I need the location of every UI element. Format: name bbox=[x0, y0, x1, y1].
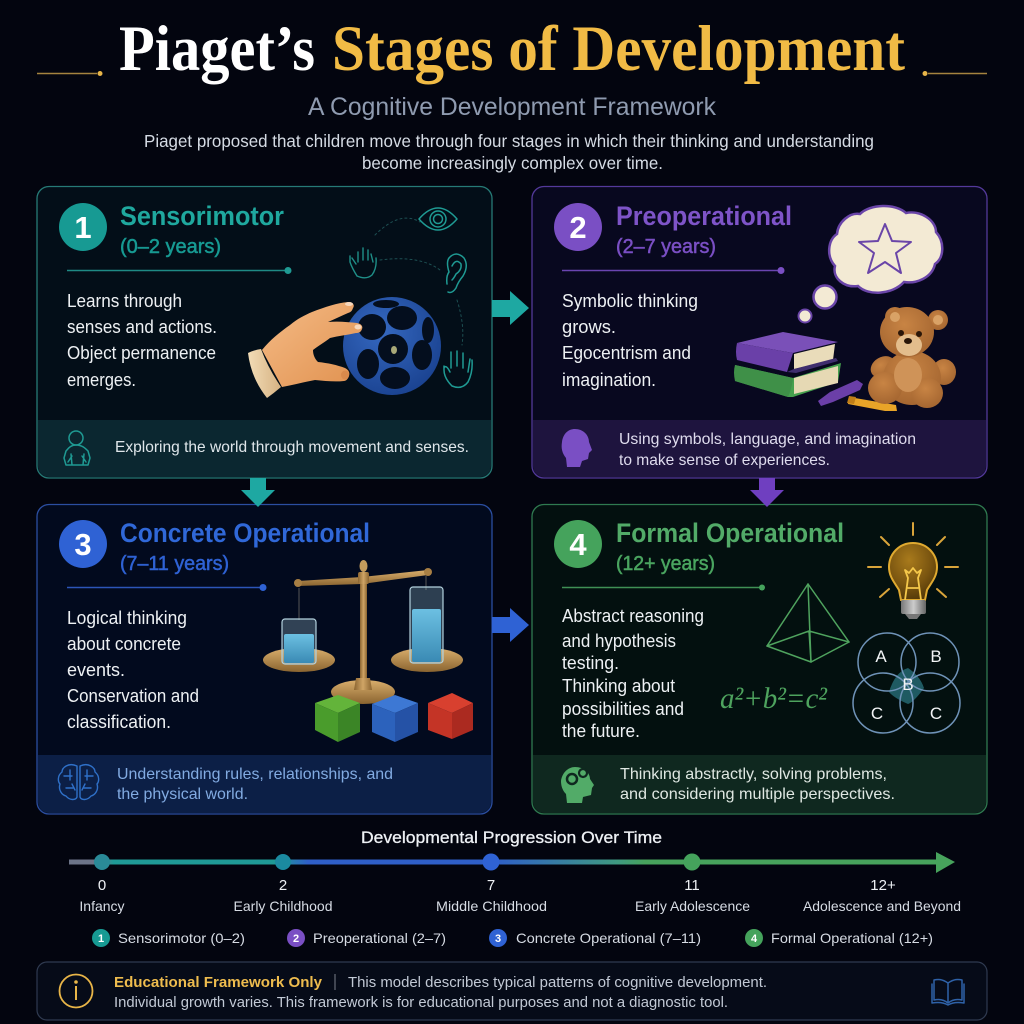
heading: Preoperational bbox=[616, 201, 792, 231]
icon: brain bbox=[58, 765, 99, 800]
number badge 1 bbox=[59, 203, 107, 251]
title: Piaget’s bbox=[119, 13, 315, 85]
body text: Object permanence bbox=[67, 343, 216, 363]
body text: emerges. bbox=[67, 370, 136, 390]
legend item 2: Preoperational (2–7) bbox=[313, 930, 446, 946]
icon: head silhouette bbox=[562, 429, 592, 467]
timeline age labels: 0 bbox=[98, 877, 106, 894]
takeaway text: Understanding rules, relationships, and bbox=[117, 766, 393, 783]
timeline nodes bbox=[94, 854, 700, 870]
timeline period labels: Early Childhood bbox=[234, 898, 332, 914]
timeline age labels: 2 bbox=[279, 877, 287, 894]
body text: grows. bbox=[562, 317, 616, 337]
intro text: Piaget proposed that children move through four stages in which their thinking and understanding bbox=[144, 131, 874, 151]
illustration: reaching hand bbox=[248, 302, 362, 398]
timeline age labels bbox=[98, 877, 896, 894]
illustration: books bbox=[734, 332, 841, 397]
number badge 2 bbox=[554, 203, 602, 251]
timeline period labels bbox=[79, 898, 961, 914]
takeaway text: Exploring the world through movement and senses. bbox=[115, 439, 469, 456]
body text: events. bbox=[67, 660, 125, 680]
icon: child outline bbox=[64, 431, 90, 465]
body text bbox=[562, 291, 698, 390]
number badge 3: 3 bbox=[74, 527, 92, 562]
takeaway text: to make sense of experiences. bbox=[619, 452, 830, 469]
legend item 4: Formal Operational (12+) bbox=[771, 930, 933, 946]
underline bbox=[67, 584, 266, 591]
heading: Formal Operational bbox=[616, 518, 844, 548]
decorative title line left bbox=[37, 71, 102, 76]
panel: stage 4 formal operational bbox=[532, 504, 987, 814]
illustration: venn diagram: C bbox=[871, 704, 883, 723]
body text: Learns through bbox=[67, 291, 182, 311]
timeline period labels: Infancy bbox=[79, 898, 125, 914]
legend item 1: 1 bbox=[98, 933, 104, 945]
legend item 1 bbox=[92, 929, 245, 947]
illustration: wireframe pyramid bbox=[767, 584, 849, 662]
arrow: stage 1 to stage 2 bbox=[492, 291, 529, 325]
body text: and hypothesis bbox=[562, 631, 676, 651]
number badge 4 bbox=[554, 520, 602, 568]
illustration: balance scale bbox=[263, 560, 463, 704]
illustration: venn diagram: B bbox=[930, 647, 942, 666]
body text: Conservation and bbox=[67, 686, 199, 706]
icon: info bbox=[60, 974, 92, 1008]
age range: (0–2 years) bbox=[120, 236, 221, 258]
illustration: venn diagram: B bbox=[902, 675, 914, 694]
illustration: venn diagram bbox=[853, 633, 960, 733]
takeaway text: and considering multiple perspectives. bbox=[620, 786, 895, 803]
body text: Egocentrism and bbox=[562, 343, 691, 363]
timeline track with arrowhead bbox=[69, 852, 955, 873]
timeline period labels: Middle Childhood bbox=[436, 898, 547, 914]
number badge 2: 2 bbox=[569, 210, 587, 245]
decorative title line right bbox=[922, 71, 987, 76]
takeaway text bbox=[620, 766, 895, 803]
underline bbox=[67, 267, 292, 274]
illustration: venn diagram: C bbox=[930, 704, 942, 723]
illustration: tall glass of water bbox=[410, 587, 443, 663]
takeaway text: the physical world. bbox=[117, 786, 248, 803]
body text: about concrete bbox=[67, 634, 181, 654]
illustration: thought cloud with star bbox=[798, 206, 942, 322]
disclaimer text bbox=[114, 975, 767, 1011]
underline bbox=[562, 267, 784, 274]
panel: stage 2 preoperational bbox=[532, 186, 987, 478]
body text: imagination. bbox=[562, 370, 656, 390]
timeline bbox=[69, 852, 961, 914]
title: Stages of Development bbox=[332, 13, 905, 85]
disclaimer text: This model describes typical patterns of cognitive development. bbox=[348, 975, 767, 991]
icon: ear bbox=[447, 254, 466, 292]
icon: open book bbox=[932, 979, 964, 1005]
illustration: short glass of water bbox=[282, 619, 316, 664]
illustration: light bulb bbox=[868, 523, 958, 619]
subtitle: A Cognitive Development Framework bbox=[308, 93, 716, 121]
icon: eye bbox=[419, 208, 457, 230]
title bbox=[37, 13, 987, 85]
body text: testing. bbox=[562, 653, 619, 673]
age range: (12+ years) bbox=[616, 553, 715, 575]
disclaimer text: Individual growth varies. This framework is for educational purposes and not a diagnostic tool. bbox=[114, 995, 728, 1011]
body text: Symbolic thinking bbox=[562, 291, 698, 311]
body text bbox=[67, 608, 199, 732]
arrow: stage 3 to stage 4 bbox=[492, 608, 529, 642]
number badge 4: 4 bbox=[569, 527, 587, 562]
intro text: become increasingly complex over time. bbox=[362, 153, 663, 173]
intro text bbox=[144, 131, 874, 173]
arrow: stage 2 to stage 4 bbox=[750, 478, 784, 507]
age range: (2–7 years) bbox=[616, 236, 716, 258]
body text: classification. bbox=[67, 712, 171, 732]
heading: Sensorimotor bbox=[120, 201, 284, 231]
illustration: venn diagram: A bbox=[875, 647, 887, 666]
equation: a²+b²=c² bbox=[720, 682, 828, 715]
illustration: ball bbox=[343, 297, 441, 395]
legend bbox=[92, 929, 933, 947]
takeaway text: Thinking abstractly, solving problems, bbox=[620, 766, 887, 783]
age range: (7–11 years) bbox=[120, 553, 229, 575]
legend item 4: 4 bbox=[751, 933, 758, 945]
icon: head with gears bbox=[561, 767, 594, 803]
illustration: teddy bear bbox=[867, 307, 956, 408]
body text: Abstract reasoning bbox=[562, 606, 704, 626]
timeline period labels: Early Adolescence bbox=[635, 898, 750, 914]
timeline age labels: 12+ bbox=[870, 877, 896, 894]
illustration: green cube bbox=[315, 695, 360, 742]
illustration: crayons bbox=[818, 380, 897, 411]
underline bbox=[562, 584, 765, 590]
takeaway text: Using symbols, language, and imagination bbox=[619, 431, 916, 448]
body text: possibilities and bbox=[562, 699, 684, 719]
body text bbox=[67, 291, 217, 390]
separator bbox=[334, 974, 336, 990]
body text: senses and actions. bbox=[67, 317, 217, 337]
icon: hand outline lower bbox=[444, 351, 472, 387]
takeaway text bbox=[117, 766, 393, 803]
timeline period labels: Adolescence and Beyond bbox=[803, 898, 961, 914]
body text: the future. bbox=[562, 721, 640, 741]
takeaway text bbox=[619, 431, 916, 469]
disclaimer heading: Educational Framework Only bbox=[114, 974, 323, 991]
legend item 3: Concrete Operational (7–11) bbox=[516, 930, 701, 946]
number badge 1: 1 bbox=[74, 210, 92, 245]
legend item 1: Sensorimotor (0–2) bbox=[118, 930, 245, 946]
number badge 3 bbox=[59, 520, 107, 568]
legend item 3: 3 bbox=[495, 933, 501, 945]
icon: hand outline upper bbox=[350, 248, 376, 278]
legend item 2: 2 bbox=[293, 933, 299, 945]
illustration: red cube bbox=[428, 693, 473, 739]
timeline age labels: 11 bbox=[684, 877, 700, 894]
body text: Thinking about bbox=[562, 676, 675, 696]
panel: stage 1 sensorimotor bbox=[37, 186, 492, 478]
icon: dotted sense arcs bbox=[375, 218, 463, 345]
heading: Concrete Operational bbox=[120, 518, 370, 548]
panel: stage 3 concrete operational bbox=[37, 504, 492, 814]
body text: Logical thinking bbox=[67, 608, 187, 628]
illustration: blue cube bbox=[372, 695, 418, 742]
timeline heading: Developmental Progression Over Time bbox=[361, 829, 662, 847]
arrow: stage 1 to stage 3 bbox=[241, 478, 275, 507]
disclaimer box bbox=[37, 962, 987, 1020]
timeline age labels: 7 bbox=[487, 877, 495, 894]
body text bbox=[562, 606, 704, 741]
